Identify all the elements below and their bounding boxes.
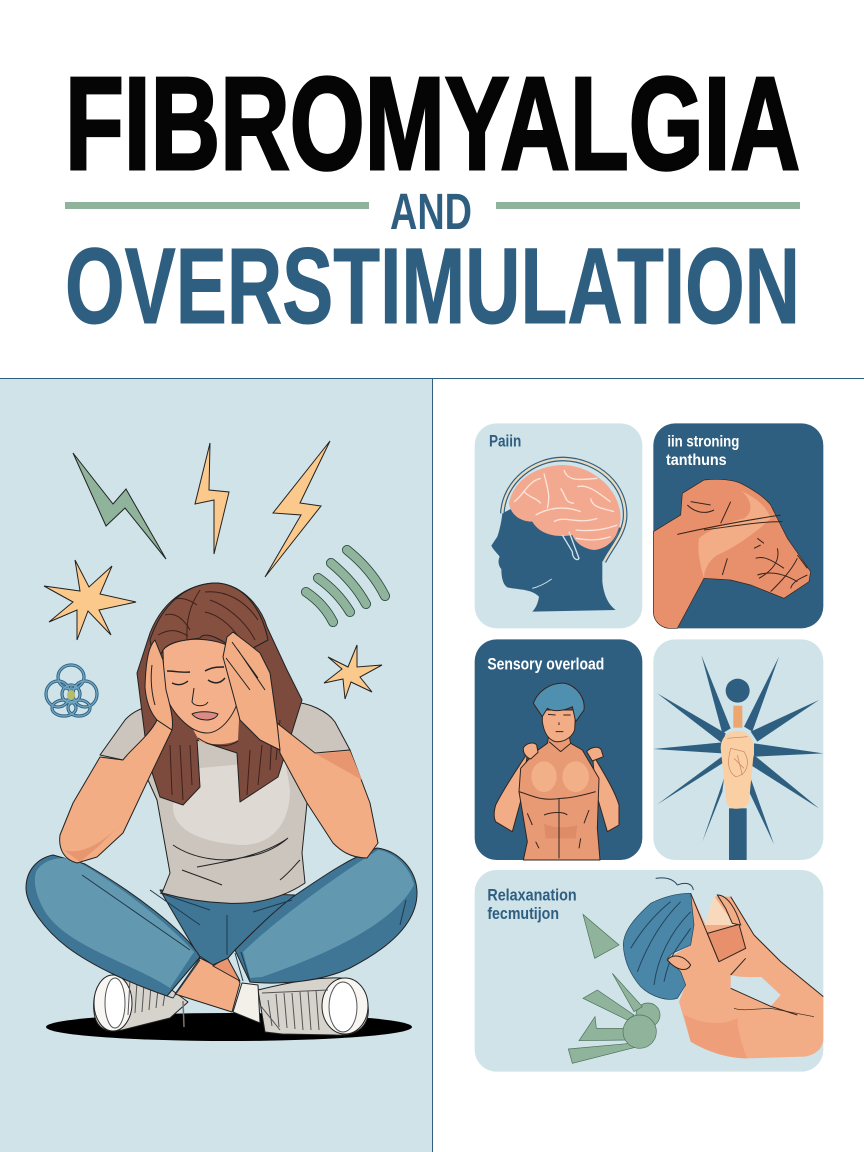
face (163, 639, 240, 733)
icon: green arrows and joint (568, 914, 660, 1063)
label: strong tension: iin stroning (667, 434, 739, 451)
icon: body figure (733, 706, 742, 728)
left sneaker (94, 975, 188, 1031)
shin and ankle (175, 957, 240, 1012)
face (542, 710, 576, 742)
label: strong tension: tanthuns (666, 452, 727, 469)
shirt (100, 702, 350, 903)
label: relaxation technique: Relaxanation (487, 886, 577, 905)
icon: person with mask, skin (667, 893, 823, 1058)
back hair (137, 583, 302, 805)
right hand (223, 632, 280, 750)
hands on shoulders (523, 743, 603, 761)
icon: large star burst (44, 560, 136, 640)
right sneaker (258, 978, 368, 1035)
hair front (150, 583, 268, 665)
panel: person with overstimulation (0, 379, 432, 1152)
left hand (145, 640, 173, 730)
jeans lap (160, 890, 295, 965)
card: strong tension with hand (653, 423, 823, 628)
shadow on the floor (46, 1013, 412, 1041)
title block (65, 50, 800, 346)
card: sensory overload with figure (475, 639, 642, 860)
label: pain: Paiin (489, 432, 521, 451)
icon: right lightning bolt (265, 441, 330, 577)
title: and: AND (390, 183, 472, 240)
card: radiating pain figure (653, 639, 823, 860)
icon: radiating spikes (653, 655, 823, 860)
icon: brain (509, 465, 621, 550)
hair (533, 683, 584, 722)
figure: seated woman holding head (26, 583, 417, 1035)
card: pain with brain and head (475, 423, 642, 628)
ear (667, 956, 691, 970)
icon: head silhouette (491, 482, 621, 612)
icon: clenched hand (653, 479, 811, 628)
right arm (277, 723, 378, 858)
icon: male torso (494, 683, 619, 860)
label: relaxation technique (487, 886, 577, 923)
icon: tangled nerve knot (46, 665, 97, 716)
neck (185, 700, 240, 744)
icon: skull outline (502, 459, 625, 562)
icon: middle lightning bolt (195, 443, 229, 554)
panel group: symptom cards (475, 423, 823, 628)
left arm (60, 720, 172, 863)
icon: sound waves (306, 550, 385, 622)
nose and lips (192, 688, 208, 706)
icon: green lightning bolt (73, 453, 166, 559)
closed eyes and brows (167, 667, 225, 685)
label: strong tension (666, 434, 739, 469)
icon: face mask (705, 896, 735, 925)
icon: blue hair (623, 893, 694, 999)
card: relaxation technique (475, 870, 823, 1072)
label: sensory overload: Sensory overload (487, 654, 604, 673)
label: relaxation technique: fecmutijon (487, 904, 559, 923)
jeans left leg (26, 855, 200, 996)
sock (233, 983, 260, 1023)
jeans right leg (235, 848, 417, 983)
icon: small star burst (324, 645, 382, 699)
